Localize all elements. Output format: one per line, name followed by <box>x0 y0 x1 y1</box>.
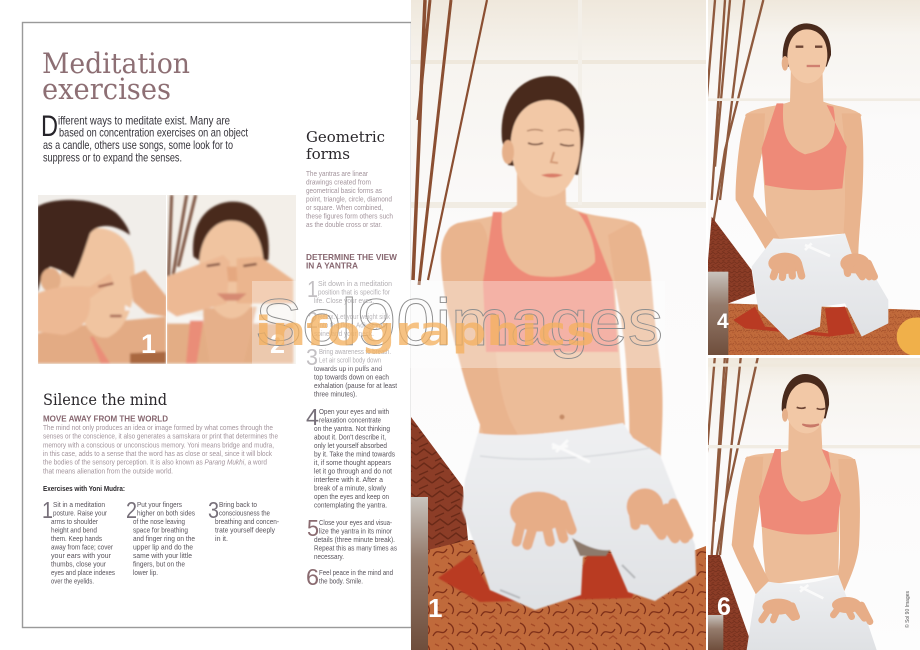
yantra step 5: lize the yantra in its minor <box>319 526 393 536</box>
curtain background <box>708 358 920 440</box>
body text: geometric forms <box>306 171 393 229</box>
yantra step 2: Relax. Let your weight sink <box>318 312 390 321</box>
exercise step 1 <box>42 497 115 586</box>
glass vase <box>411 497 428 650</box>
figure <box>732 374 877 650</box>
yantra step 2: spine and your neck. <box>314 329 374 338</box>
yantra step 4: by it. Take the mind towards <box>314 450 395 458</box>
exercise step 1: over the eyelids. <box>51 576 94 586</box>
yantra step 6: 6 <box>306 564 319 590</box>
intro paragraph: ifferent ways to meditate exist. Many are <box>58 114 230 128</box>
exercise step 1: your ears with your <box>51 551 112 560</box>
yantra step 4: 4 <box>306 404 319 430</box>
exercise step 2: upper lip and do the <box>133 542 193 552</box>
heading: geometric forms: Geometric <box>306 128 385 146</box>
body text: silence the mind: in this case, adds to a sense that the word has as close or seal, since it will block <box>43 451 273 458</box>
step number 1: 1 <box>428 593 442 623</box>
yantra step 4: interfere with it. After a <box>314 475 384 484</box>
figure <box>736 23 888 340</box>
yantra step 4: it, if some thought appears <box>314 458 391 467</box>
body text: geometric forms: or square. When combined, <box>306 205 383 212</box>
body text: geometric forms: point, triangle, circle, diamond <box>306 196 392 204</box>
exercise step 3: trate yourself deeply <box>215 526 275 534</box>
exercise step 1: eyes and place indexes <box>51 568 115 577</box>
intro paragraph: suppress or to expand the senses. <box>43 152 182 164</box>
exercise step 2: and finger ring on the <box>133 534 195 543</box>
yantra step 4: Open your eyes and with <box>319 407 389 416</box>
bamboo reeds <box>413 0 487 285</box>
title: exercises <box>42 72 171 106</box>
body text: silence the mind: the bodies of the sensory perception. It is also known as Parang Mukhi, a word <box>43 460 267 467</box>
yantra step 3: towards up in puffs and <box>314 364 382 373</box>
yantra step 3: 3 <box>306 344 318 370</box>
yantra step 6: the body. Smile. <box>319 576 363 586</box>
heading: geometric forms: forms <box>306 145 350 163</box>
exercise step 2: space for breathing <box>133 526 188 534</box>
curtain background <box>708 0 920 98</box>
yantra step 4: about it. Don't describe it, <box>314 432 386 442</box>
title: Meditation <box>42 47 190 80</box>
photo: seated pose smiling <box>705 355 920 650</box>
watermark: Sol90images <box>255 285 663 359</box>
body text: silence the mind: senses or the conscience, it also generates a samskara or print that determines the <box>43 434 278 441</box>
pillow <box>708 555 749 650</box>
exercise step 3: consciousness the <box>219 508 270 518</box>
subheading: determine the view in a yantra: DETERMINE THE VIEW <box>306 252 397 262</box>
step number 6: 6 <box>717 593 731 621</box>
yantra step 6 <box>306 564 393 590</box>
yantra step 3: Let air scroll body down <box>319 356 381 364</box>
carpet and cushions <box>411 417 706 650</box>
step number 4: 4 <box>717 310 729 333</box>
yantra step 1: life. Close your eyes. <box>314 296 374 305</box>
body text: silence the mind <box>43 425 278 475</box>
text panel frame <box>22 22 412 628</box>
body text: silence the mind: The mind not only produces an idea or image formed by what comes through the <box>43 425 273 432</box>
yantra step 4: on the yantra. Not thinking <box>314 424 390 433</box>
yantra step 4: only let yourself absorbed <box>314 441 387 450</box>
yantra step 3: three minutes). <box>314 390 357 398</box>
subheading: exercises with yoni mudra: Exercises with Yoni Mudra: <box>43 484 125 493</box>
glass vase <box>707 615 723 650</box>
step number 1: 1 <box>141 329 156 359</box>
photo: seated pose looking up <box>705 0 920 356</box>
yantra step 1: 1 <box>307 276 318 302</box>
figure <box>441 76 696 610</box>
yantra step 5 <box>307 515 397 561</box>
photo: yoni mudra step 1 <box>37 195 167 364</box>
yantra step 5: necessary. <box>314 552 344 561</box>
intro paragraph: based on concentration exercises on an object <box>59 126 249 140</box>
reeds <box>708 358 759 556</box>
intro paragraph: D <box>41 110 58 143</box>
yantra step 1 <box>307 276 392 305</box>
yantra step 4 <box>306 404 395 510</box>
exercise step 1: away from face; cover <box>51 542 113 552</box>
yantra step 2: 2 <box>307 307 318 333</box>
exercise step 1: height and bend <box>51 526 97 534</box>
exercise step 2 <box>126 497 195 577</box>
yantra step 4: let it go through and do not <box>314 466 392 476</box>
yantra step 3 <box>306 344 397 398</box>
glass vase <box>707 272 728 355</box>
carpet and pillow <box>728 303 920 355</box>
step number 2: 2 <box>270 329 285 359</box>
yantra step 4: contemplating the yantra. <box>314 500 387 510</box>
exercise step 2: lower lip. <box>133 568 158 577</box>
intro paragraph: as a candle, others use songs, some look for to <box>43 139 233 152</box>
yantra step 4: relaxation concentrate <box>319 416 381 424</box>
curtain background <box>411 0 706 419</box>
intro paragraph <box>41 110 249 164</box>
exercise step 1: Sit in a meditation <box>53 500 105 509</box>
body text: geometric forms: The yantras are linear <box>306 171 369 178</box>
body text: geometric forms: as the double cross or star. <box>306 222 382 229</box>
exercise step 2: higher on both sides <box>137 508 195 518</box>
exercise step 1: thumbs, close your <box>51 560 107 568</box>
body text: silence the mind: that means alienation from the outside world. <box>43 468 173 475</box>
exercise step 1: posture. Raise your <box>53 508 107 518</box>
body text: geometric forms: drawings created from <box>306 180 371 186</box>
photo: large seated meditation pose <box>411 0 706 650</box>
yantra step 2 <box>307 307 390 338</box>
photo credit: © Sol 90 Images <box>904 591 911 628</box>
body text: geometric forms: geometrical basic forms as <box>306 188 383 195</box>
yantra step 4: open the eyes and keep on <box>314 492 389 501</box>
yantra step 5: details (three minute break). <box>314 535 395 544</box>
yantra step 5: Repeat this as many times as <box>314 544 397 552</box>
subheading: move away from the world: MOVE AWAY FROM THE WORLD <box>43 414 168 424</box>
heading: silence the mind: Silence the mind <box>43 391 167 409</box>
yantra step 2: into the floor. Adjust your <box>318 320 388 330</box>
exercise step 2: fingers, but on the <box>133 560 185 568</box>
exercise step 3: breathing and concen- <box>215 517 279 526</box>
yantra step 1: position that is specific for <box>318 288 390 296</box>
yantra step 3: top towards down on each <box>314 372 389 382</box>
yantra step 3: Bring awareness to breath. <box>319 347 391 356</box>
subheading: determine the view in a yantra: IN A YANTRA <box>306 260 358 270</box>
title <box>42 47 190 106</box>
exercise step 1: 1 <box>42 497 53 523</box>
body text: silence the mind: memory with a conscious or unconscious memory. Yoni means bridge and mudra, <box>43 442 274 449</box>
exercise step 2: Put your fingers <box>137 500 182 509</box>
exercise step 2: same with your little <box>133 551 192 560</box>
photo: yoni mudra step 2 <box>167 195 296 364</box>
heading: geometric forms <box>306 128 385 163</box>
orange fruit <box>897 317 920 356</box>
body text: geometric forms: these figures form others such <box>306 214 393 220</box>
watermark: infographics <box>255 309 595 355</box>
exercise step 1: them. Keep hands <box>51 534 102 543</box>
exercise step 2: of the nose leaving <box>133 517 185 526</box>
yantra step 6: Feel peace in the mind and <box>319 568 393 577</box>
yantra step 5: Close your eyes and visua- <box>319 518 392 527</box>
subheading: determine the view in a yantra <box>306 252 397 270</box>
exercise step 3: in it. <box>215 534 228 543</box>
yantra step 5: 5 <box>307 515 319 541</box>
reeds <box>707 0 763 233</box>
exercise step 1: arms to shoulder <box>51 517 98 526</box>
exercise step 3 <box>208 497 279 543</box>
yantra step 3: exhalation (pause for at least <box>314 381 397 390</box>
exercise step 3: 3 <box>208 497 219 523</box>
exercise step 2: 2 <box>126 497 137 523</box>
exercise step 3: Bring back to <box>219 500 257 509</box>
yantra step 1: Sit down in a meditation <box>318 279 392 288</box>
yantra step 4: break of a minute, slowly <box>314 484 386 492</box>
